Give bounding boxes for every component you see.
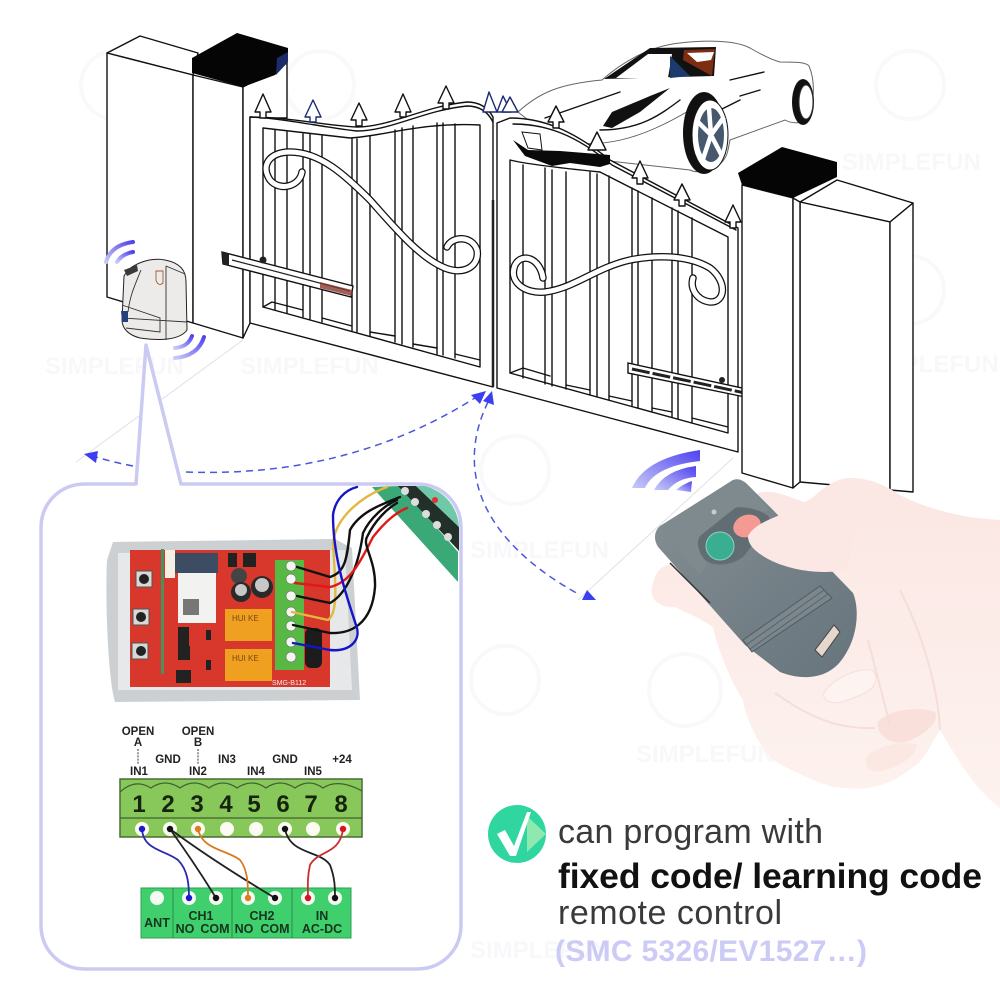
receiver terminal: AC-DC: [302, 922, 342, 936]
caption text: fixed code/ learning code: [558, 856, 982, 896]
terminal labels: OPEN: [182, 726, 214, 738]
watermark: SIMPLEFUN: [470, 937, 609, 964]
check badge icon: [488, 805, 546, 863]
8-pin terminal: 2: [161, 791, 175, 818]
caption text: remote control: [558, 894, 782, 932]
caption text: (SMC 5326/EV1527…): [555, 935, 867, 968]
right scroll: [513, 257, 722, 302]
relays: HUI KE: [232, 654, 259, 663]
red PCB: [130, 550, 330, 687]
front wheel: [683, 92, 728, 174]
right gate bars: [523, 165, 692, 422]
receiver terminal: IN: [316, 909, 328, 923]
arrow heads: [84, 391, 596, 600]
receiver terminal: NO: [176, 922, 195, 936]
receiver terminal: ANT: [144, 916, 170, 930]
8-pin terminal: 5: [247, 791, 261, 818]
receiver board photo: SMG-B112: [272, 680, 306, 687]
relays: [225, 609, 272, 681]
green button: [706, 532, 734, 560]
receiver terminal: CH2: [249, 909, 275, 923]
terminal labels: IN4: [247, 766, 266, 778]
left actuator arm: [222, 252, 353, 297]
ridge band: [743, 586, 832, 652]
wifi module: [174, 553, 218, 573]
terminal labels: A: [134, 737, 142, 749]
caption text: can program with: [558, 813, 823, 851]
green terminal block: [275, 560, 304, 670]
terminal labels: IN1: [130, 766, 149, 778]
hand: [652, 478, 1000, 808]
watermark: SIMPLEFUN: [120, 151, 259, 178]
watermark: SIMPLEFUN: [636, 741, 775, 768]
terminal wiring: [139, 826, 346, 901]
terminal labels: IN2: [189, 766, 207, 778]
left gate spikes: [255, 86, 511, 126]
motor unit: [121, 259, 187, 340]
watermark: SIMPLEFUN: [650, 351, 789, 378]
watermark: SIMPLEFUN: [842, 149, 981, 176]
black shadow band across gate top: [513, 140, 610, 167]
remote signal icon: [632, 450, 700, 492]
thumb over remote: [748, 494, 854, 572]
remote control: [655, 479, 857, 677]
receiver terminal: COM: [260, 922, 290, 936]
key ring slot: [815, 625, 840, 657]
callout panel: [41, 345, 461, 969]
relays: HUI KE: [232, 614, 259, 623]
receiver board photo: [106, 486, 460, 702]
rear wheel: [792, 79, 814, 125]
left gate bars: [275, 123, 455, 358]
signal arrows: [138, 749, 198, 765]
watermark: SIMPLEFUN: [45, 353, 184, 380]
terminal labels: B: [194, 737, 202, 749]
external green board: [372, 486, 460, 582]
receiver terminal: [141, 888, 351, 938]
coil antenna: [305, 628, 322, 668]
terminal labels: +24: [332, 754, 352, 766]
8-pin terminal: [120, 779, 362, 837]
terminal labels: GND: [155, 754, 181, 766]
8-pin terminal: 3: [190, 791, 204, 818]
panel outline: [41, 345, 461, 969]
right actuator arm: [628, 363, 760, 400]
gray case: [106, 539, 360, 702]
car line drawing: [512, 41, 814, 174]
right pillar cap: [738, 147, 837, 198]
watermark: SIMPLEFUN: [860, 351, 999, 378]
dashed arrows: [96, 396, 580, 595]
right gate leaf: [497, 118, 738, 452]
8-pin terminal: 1: [132, 791, 146, 818]
8-pin terminal: 6: [276, 791, 290, 818]
left pillars: [107, 33, 288, 338]
wires: [292, 487, 407, 650]
terminal labels: OPEN: [122, 726, 154, 738]
pink button: [730, 511, 764, 541]
right gate spikes: [502, 97, 741, 228]
left scroll: [266, 152, 477, 271]
8-pin terminal: 4: [219, 791, 233, 818]
watermark: SIMPLEFUN: [470, 537, 609, 564]
terminal labels: IN5: [304, 766, 323, 778]
terminal labels: IN3: [218, 754, 236, 766]
receiver terminal: CH1: [188, 909, 214, 923]
signal waves at motor: [106, 242, 204, 358]
caption text: [555, 813, 982, 968]
capacitors: [231, 568, 273, 602]
right pillars: [738, 147, 913, 492]
terminal labels: [122, 726, 352, 778]
8-pin terminal: 8: [334, 791, 348, 818]
8-pin terminal: 7: [304, 791, 318, 818]
receiver terminal: COM: [200, 922, 230, 936]
terminal labels: GND: [272, 754, 298, 766]
finger nails: [823, 670, 876, 703]
receiver terminal: NO: [235, 922, 254, 936]
tact buttons: [132, 571, 152, 659]
watermark: SIMPLEFUN: [240, 353, 379, 380]
left gate leaf: [250, 102, 493, 387]
pillar cap: [192, 33, 288, 87]
ground guide lines: [76, 340, 733, 600]
